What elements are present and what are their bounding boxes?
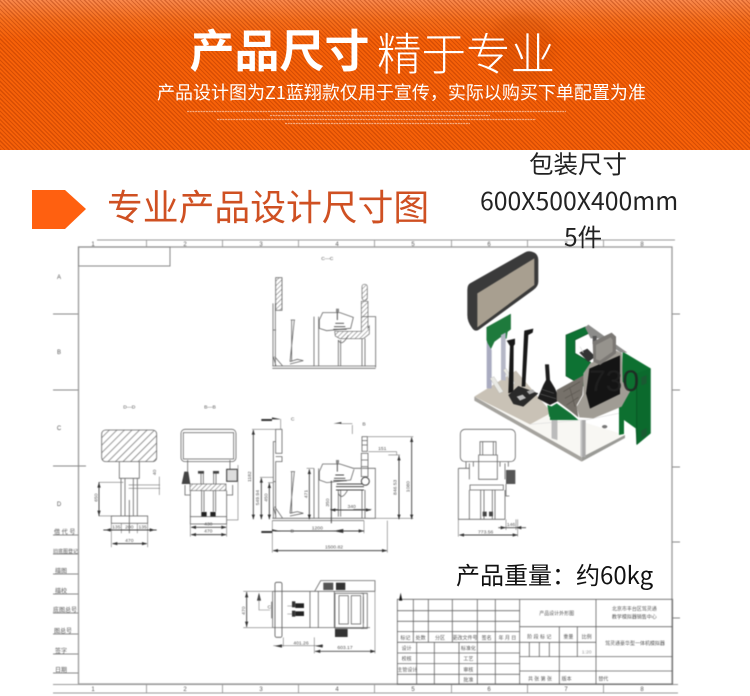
- view D-D: 135: [112, 525, 121, 531]
- package dimensions: 600X500X400mm: [480, 182, 678, 218]
- sheet frame and rulers: D: [57, 502, 62, 508]
- sheet frame and rulers: [53, 240, 680, 693]
- sheet frame and rulers: 6: [487, 687, 491, 693]
- plan view: C: [268, 604, 272, 610]
- title block: 设计: [402, 645, 412, 652]
- sheet frame and rulers: 2: [183, 242, 187, 248]
- left revision table: 签字: [55, 647, 67, 655]
- sheet frame and rulers: A: [57, 275, 61, 281]
- title block: 更改文件号: [453, 634, 477, 641]
- view D-D: 650: [94, 493, 100, 502]
- sheet frame and rulers: 3: [259, 687, 263, 693]
- title block: 替代: [598, 676, 608, 683]
- title block: 主管设计: [397, 666, 417, 673]
- product weight: 产品重量：约60kg: [456, 556, 653, 591]
- overlaid dimension 730: 730: [589, 365, 639, 398]
- view C-C: C—C: [321, 256, 334, 262]
- title block: 签名: [482, 634, 492, 641]
- side view with dimensions: 1500.82: [325, 545, 343, 551]
- package quantity: 5件: [564, 219, 602, 254]
- left revision table: 日期: [55, 666, 67, 674]
- view D-D: [94, 404, 160, 547]
- side view with dimensions: C: [291, 417, 295, 423]
- sheet frame and rulers: 7: [564, 687, 568, 693]
- side view with dimensions: D: [291, 529, 295, 535]
- sheet frame and rulers: 1: [91, 242, 95, 248]
- left revision table: 描图: [55, 567, 67, 575]
- view B-B: 470: [204, 529, 213, 535]
- title block: 分区: [435, 634, 445, 641]
- title block: [397, 593, 673, 684]
- view D-D: 135: [138, 525, 147, 531]
- package size label: 包装尺寸: [529, 146, 627, 181]
- sheet frame and rulers: 3: [259, 242, 263, 248]
- view B-B: 430: [204, 521, 213, 527]
- title block: 1:20: [582, 649, 592, 655]
- side view with dimensions: 450: [264, 493, 270, 502]
- title block: 处数: [416, 634, 426, 641]
- title block: 产品设计外形图: [539, 610, 574, 617]
- title block: 校核: [402, 656, 412, 663]
- side view with dimensions: B: [362, 422, 366, 428]
- title block: 驾灵通豪华型一体机模拟器: [605, 640, 665, 647]
- side view with dimensions: [247, 417, 413, 553]
- side view with dimensions: 1080: [405, 481, 411, 492]
- rear view: 146: [507, 522, 515, 528]
- view D-D: 470: [125, 538, 134, 544]
- pedal levers and joystick: [490, 329, 562, 440]
- side view with dimensions: 1182: [247, 471, 253, 482]
- plan view: 470: [241, 606, 247, 615]
- view B-B: [181, 404, 238, 537]
- sheet frame and rulers: 7: [564, 242, 568, 248]
- sheet frame and rulers: 6: [487, 242, 491, 248]
- sheet frame and rulers: 2: [183, 687, 187, 693]
- side view with dimensions: 340: [347, 504, 356, 510]
- sheet frame and rulers: 8: [640, 242, 644, 248]
- monitor: [467, 251, 538, 388]
- title block: 版本: [562, 676, 572, 683]
- title block: 重量: [563, 634, 573, 641]
- side view with dimensions: 846.53: [392, 479, 398, 495]
- side view with dimensions: 549.94: [255, 490, 261, 505]
- left revision table: 旧底图登记: [53, 548, 78, 555]
- left revision table: [53, 528, 78, 674]
- sheet frame and rulers: 1: [91, 687, 95, 693]
- 3D product model: [467, 251, 651, 462]
- title block: 年 月 日: [498, 634, 516, 641]
- sheet frame and rulers: C: [57, 426, 62, 432]
- plan view: 401.26: [293, 640, 309, 646]
- left revision table: 图总号: [54, 627, 72, 635]
- left revision table: 借 代 号: [54, 528, 75, 536]
- title block: 工艺: [463, 657, 473, 663]
- right green panel: [606, 352, 651, 445]
- view D-D: D—D: [123, 404, 136, 410]
- banner subtitle: 产品设计图为Z1蓝翔款仅用于宣传，实际以购买下单配置为准: [157, 79, 646, 105]
- section arrow icon: [32, 190, 86, 229]
- sheet frame and rulers: 5: [411, 687, 415, 693]
- plan view: 603.17: [337, 645, 353, 651]
- sheet frame and rulers: 5: [411, 242, 415, 248]
- side view with dimensions: 1200: [312, 525, 323, 531]
- section heading: 专业产品设计尺寸图: [107, 188, 429, 228]
- view D-D: 40: [152, 469, 158, 475]
- seat and green back panel: [550, 325, 630, 420]
- left revision table: 底图总号: [53, 606, 77, 614]
- view D-D: 200: [125, 525, 134, 531]
- view C-C: [272, 256, 376, 368]
- sheet frame and rulers: 4: [335, 242, 339, 248]
- side view with dimensions: 151: [378, 446, 387, 452]
- left revision table: 描校: [55, 587, 67, 595]
- title block: 共 张 第 张: [528, 676, 552, 683]
- model base frame: [474, 371, 625, 462]
- title block: 比例: [582, 634, 592, 641]
- title block: 批准: [463, 677, 473, 684]
- banner fine print lines: [187, 110, 566, 124]
- title block: 阶 段 标 记: [527, 634, 551, 641]
- banner title bold: 产品尺寸: [190, 26, 370, 76]
- side view with dimensions: 350: [325, 498, 331, 507]
- banner title light: 精于专业: [377, 18, 555, 83]
- view B-B: B—B: [204, 404, 216, 410]
- sheet frame and rulers: 8: [640, 687, 644, 693]
- plan view: [241, 581, 376, 653]
- sheet frame and rulers: B: [57, 350, 61, 356]
- rear view: [458, 429, 526, 537]
- rear view: 773.56: [478, 529, 494, 535]
- title block: 审核: [463, 666, 473, 673]
- sheet frame and rulers: 4: [335, 687, 339, 693]
- title block: 标准化: [461, 645, 476, 652]
- title block: 北京市丰台区驾灵通: [612, 606, 657, 613]
- title block: 标记: [400, 634, 410, 641]
- header banner: [0, 0, 750, 150]
- side view with dimensions: 471: [303, 490, 309, 498]
- title block: 教学模拟器销售中心: [612, 613, 657, 620]
